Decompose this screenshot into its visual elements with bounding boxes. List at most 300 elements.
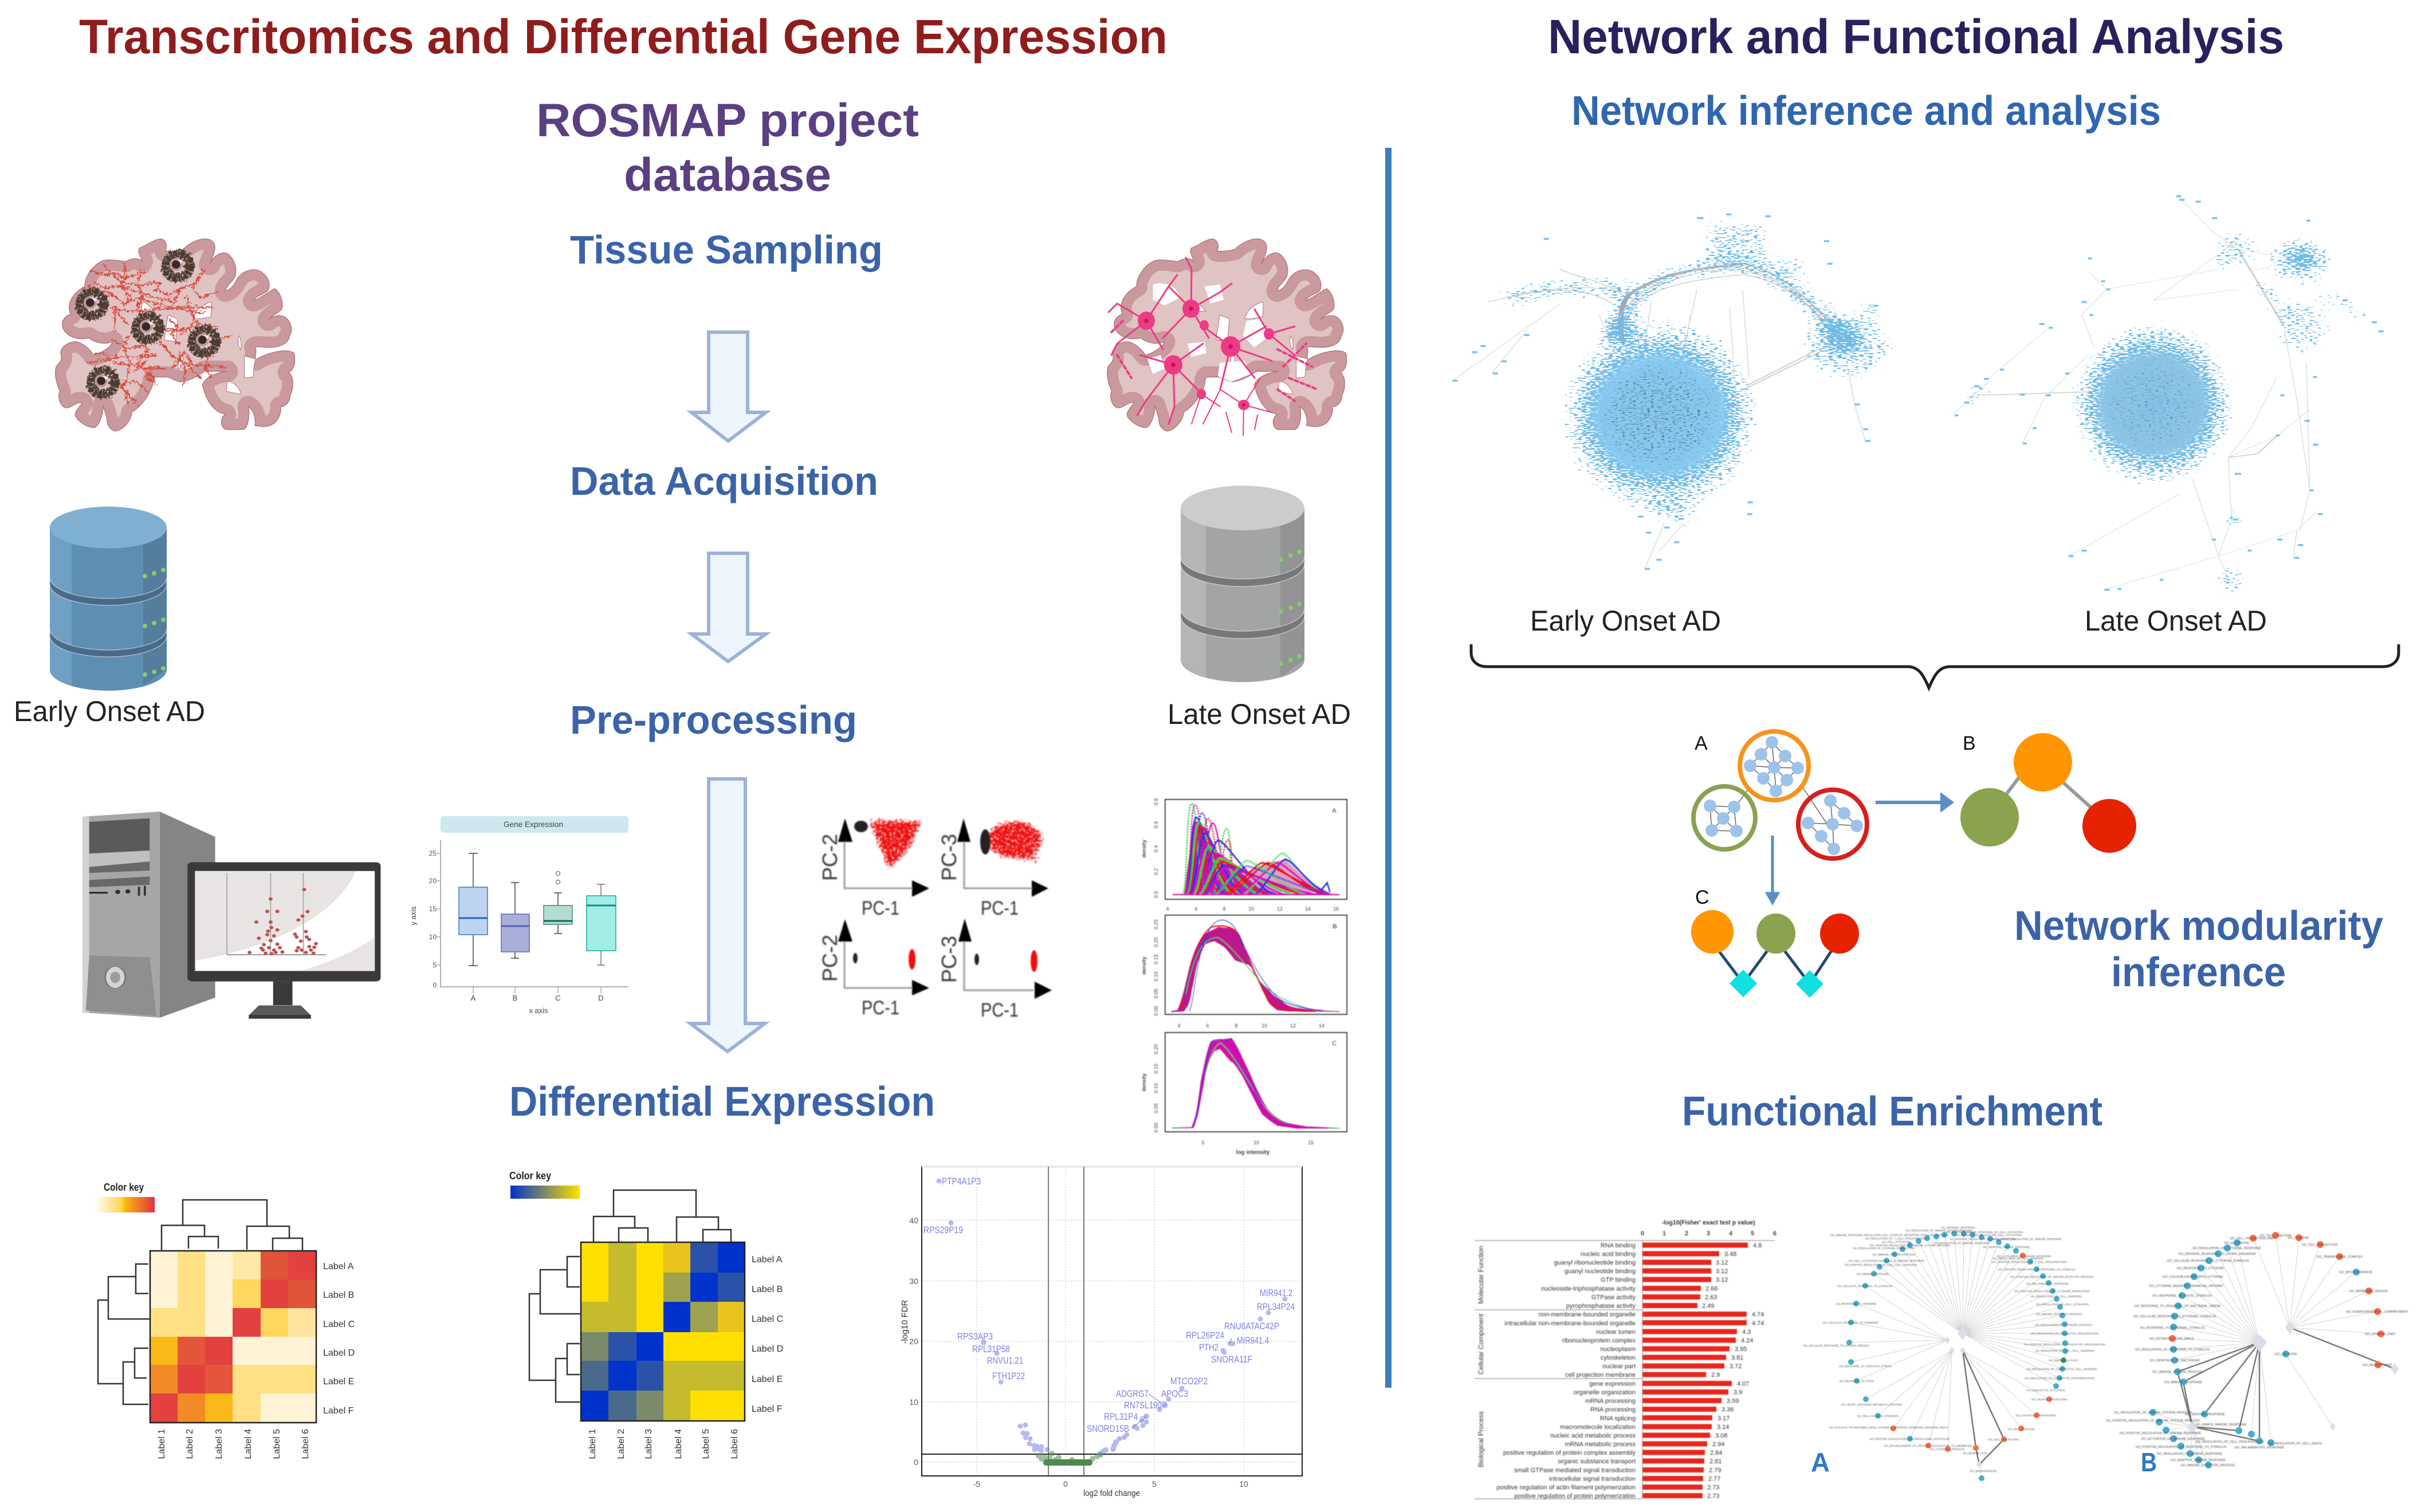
GO network A labels: GO_NEURON_PROJECTION [2031, 1398, 2067, 1401]
chart: heatmap 2 (blue-yellow) with dendrograms: Label F [752, 1404, 783, 1414]
chart: gene expression box plot: 0 [433, 981, 437, 989]
GO network B labels: GO_ACTIVATION_OF_IMMUNE_RESPONSE [2141, 1438, 2205, 1441]
bar values: 3.36 [1722, 1407, 1734, 1413]
bar values: 4.74 [1752, 1312, 1764, 1318]
bar values: 3.12 [1716, 1268, 1728, 1275]
chart: heatmap 1 (red-yellow) with dendrograms: Label E [323, 1377, 354, 1387]
volcano gene labels: RPL31P58 [972, 1344, 1010, 1354]
arrow: data acquisition to pre-processing [691, 553, 766, 662]
density plot A axes: 0.2 [1153, 868, 1159, 875]
bar values: 4.07 [1737, 1380, 1749, 1387]
chart: PCA scatter panels: PC-1 [981, 897, 1019, 919]
chart: heatmap 2 (blue-yellow) with dendrograms: Label E [752, 1375, 783, 1384]
chart: gene expression box plot: 25 [429, 849, 437, 857]
heading: Network modularity inference: Network modularity [2014, 903, 2383, 949]
density plot C axes: density [1141, 1073, 1147, 1092]
volcano gene labels [923, 1176, 1295, 1434]
bar values: 3.17 [1717, 1415, 1730, 1422]
color key [95, 1182, 155, 1212]
volcano axes: 40 [909, 1216, 918, 1225]
heading: Data Acquisition: Data Acquisition [570, 459, 878, 503]
heading: Differential Expression: Differential Expression [509, 1079, 935, 1125]
chart: heatmap 1 (red-yellow) with dendrograms: Label 6 [301, 1429, 311, 1459]
GO network A labels: GO_SYNAPTIC_COMPARTMENT [2016, 1414, 2057, 1417]
GO network B labels [2106, 1234, 2408, 1467]
GO network B labels: GO_REGULATION_OF_RESPONSE_TO_STIMULUS [2135, 1348, 2210, 1352]
GO network B labels: GO_EXTRACELLULAR_SPACE [2149, 1337, 2194, 1341]
bar labels: small GTPase mediated signal transduction [1514, 1467, 1636, 1474]
bar labels: mRNA processing [1585, 1398, 1636, 1405]
bar values: 4.3 [1742, 1329, 1751, 1336]
GO network A labels: GO_RNA_CATABOLIC_PROCESS [1857, 1415, 1899, 1418]
bar labels: cytoskeleton [1601, 1354, 1636, 1361]
volcano gene labels: RPS29P19 [923, 1224, 963, 1235]
diagram: network modules A B C [1691, 731, 2136, 998]
chart: gene expression box plot: C [555, 994, 561, 1002]
bar labels: nuclear lumen [1596, 1329, 1636, 1336]
bar labels: RNA splicing [1600, 1415, 1636, 1422]
chart: GO enrichment bar chart [1475, 1219, 1777, 1500]
density plot A axes: 6 [1194, 906, 1198, 912]
density plot B axes: 12 [1290, 1023, 1296, 1029]
volcano gene labels: RNU6ATAC42P [1224, 1321, 1279, 1332]
PCA blobs [868, 819, 1044, 872]
chart: PCA scatter panels: PC-2 [818, 935, 842, 982]
density plot B axes: 8 [1235, 1023, 1238, 1029]
heading: Tissue Sampling: Tissue Sampling [570, 227, 883, 272]
bars [1642, 1243, 1748, 1498]
chart: heatmap 2 (blue-yellow) with dendrograms: Label 5 [701, 1429, 711, 1459]
bar labels: macromolecule localization [1560, 1424, 1636, 1431]
bar values: 2.79 [1709, 1467, 1721, 1474]
GO network A labels: GO_POSITIVE_REGULATION_OF_CELL_ACTIVATION [1950, 1238, 2016, 1241]
bar labels: intracellular non-membrane-bounded organelle [1504, 1320, 1636, 1327]
GO network B labels: GO_SYNAPSE_PART [2365, 1333, 2396, 1336]
label: Early Onset AD (network): Early Onset AD [1530, 605, 1721, 637]
GO network B labels: GO_SOMATODENDRITIC_COMPARTMENT [2346, 1310, 2408, 1314]
chart: gene expression box plot: A [471, 994, 476, 1002]
GO network A labels: GO_POSITIVE_REGULATION_OF_RESPONSE_TO_STIMULUS [1998, 1268, 2075, 1271]
bar labels: nuclear part [1602, 1363, 1636, 1370]
volcano gene labels: RNVU1.21 [987, 1355, 1023, 1366]
panel B: module graph [1960, 733, 2136, 853]
bar values: 2.63 [1705, 1294, 1717, 1301]
bar values: 3.72 [1730, 1363, 1742, 1370]
density plot B axes: 0.00 [1153, 1006, 1159, 1016]
GO network B labels: GO_CYTOKINE_MEDIATED_SIGNALING_PATHWAY [2149, 1285, 2223, 1288]
box plot header: Gene Expression [504, 820, 563, 829]
GO network B labels: GO_INNATE_IMMUNE_RESPONSE [2196, 1423, 2247, 1427]
heatmap cells [581, 1242, 745, 1421]
GO network A labels: GO_NUCLEAR_TRANSCRIBED_MRNA_CATABOLIC_PROCESS_NONSENSE_MEDIATED_DECAY [1829, 1426, 1948, 1429]
bar labels: organic substance transport [1558, 1458, 1636, 1465]
density plot A axes: 0.6 [1153, 821, 1159, 828]
density plot B axes: 0.20 [1153, 937, 1159, 947]
bar values: 3.08 [1715, 1432, 1727, 1439]
bar labels: ribonucleoprotein complex [1562, 1337, 1636, 1344]
volcano gene labels: PTH2 [1199, 1342, 1219, 1353]
density plot C axes: 0.00 [1153, 1123, 1159, 1133]
bar labels: intracellular signal transduction [1549, 1475, 1636, 1482]
GO network A labels: GO_REGULATION_OF_LEUKOCYTE_PROLIFERATION [2031, 1332, 2098, 1335]
density plot A axes: 14 [1305, 906, 1311, 912]
chart: GO enrichment bar chart: 4 [1729, 1230, 1733, 1237]
panel letter A: A [1811, 1447, 1830, 1477]
density plot B axes: 6 [1206, 1023, 1209, 1029]
bar labels: gene expression [1589, 1380, 1636, 1387]
GO network A labels: GO_REGULATION_OF_MYELOID_CELL_ACTIVATION [1956, 1234, 2021, 1237]
bar labels: guanyl ribonucleotide binding [1554, 1259, 1636, 1266]
dendrograms [529, 1190, 731, 1402]
GO network A labels: GO_REGULATION_OF_CELL_ACTIVATION [2036, 1303, 2089, 1306]
bar values: 3.59 [1727, 1398, 1739, 1405]
GO network B labels: GO_DEFENSE_RESPONSE_TO_OTHER_ORGANISM [2179, 1253, 2256, 1256]
bar values: 4.24 [1741, 1337, 1753, 1344]
volcano green points [1036, 1451, 1103, 1466]
GO network B labels: GO_LOCATION [2275, 1353, 2297, 1356]
bar values: 3.12 [1716, 1259, 1728, 1266]
GO network B labels: GO_COLOCALIZATION_WITH_CYTOKINE [2163, 1275, 2223, 1279]
chart: density plots A B C [1141, 798, 1347, 1156]
panel A: module networks: A [1695, 733, 1708, 754]
bar values: 2.73 [1707, 1493, 1719, 1500]
chart: GO enrichment bar chart: 1 [1662, 1230, 1666, 1237]
bar labels: mRNA metabolic process [1565, 1441, 1636, 1448]
box A [459, 853, 488, 966]
density plot C axes [1141, 1040, 1337, 1156]
volcano gene labels: SNORD15B [1087, 1423, 1129, 1434]
density plot C axes: 10 [1253, 1140, 1259, 1145]
GO network B labels: GO_REGULATION_OF_IMMUNE_RESPONSE [2157, 1452, 2223, 1456]
chart: heatmap 1 (red-yellow) with dendrograms [95, 1182, 355, 1459]
GO network A labels: GO_INFLAMMATORY_RESPONSE [2026, 1282, 2069, 1285]
GO network B labels: GO_REGULATION_OF_CELL_DEATH [2268, 1442, 2322, 1446]
chart: gene expression box plot: 10 [429, 933, 437, 941]
arrow: tissue sampling to data acquisition [691, 332, 766, 441]
density plot B axes: 0.25 [1153, 919, 1159, 930]
GO network B labels: GO_ADAPTIVE_IMMUNE_RESPONSE [2171, 1459, 2226, 1462]
icon: desktop computer with volcano plot on screen [82, 812, 380, 1019]
GO network A labels [1803, 1226, 2105, 1472]
chart: heatmap 1 (red-yellow) with dendrograms: Label A [323, 1262, 354, 1271]
chart: gene expression box plot: B [513, 994, 517, 1002]
volcano gene labels: FTH1P22 [992, 1371, 1025, 1381]
density plot C axes: log intensity [1236, 1149, 1270, 1156]
title: Transcritomics and Differential Gene Expression: Transcritomics and Differential Gene Expression [79, 10, 1168, 64]
box C [544, 872, 572, 934]
chart: GO enrichment bar chart: -log10(Fisher' exact test p value) [1661, 1219, 1755, 1226]
heading: Functional Enrichment: Functional Enrichment [1682, 1089, 2102, 1135]
label: Late Onset AD (network): Late Onset AD [2085, 605, 2267, 637]
GO network A labels: GO_REGULATION_OF_CELL_ADHESION [2031, 1295, 2081, 1298]
bar values: 3.9 [1734, 1389, 1742, 1396]
chart: PCA scatter panels: PC-3 [937, 936, 961, 983]
bar labels: positive regulation of actin filament polymerization [1496, 1485, 1636, 1491]
network graph: late onset AD [1951, 196, 2383, 595]
density plot A axes: density [1141, 840, 1147, 858]
chart: PCA scatter panels: PC-3 [937, 834, 961, 881]
bar values [1702, 1242, 1764, 1500]
GO network A hubs [1944, 1326, 1982, 1468]
density plot A axes: 10 [1248, 906, 1254, 912]
density plot C axes: 5 [1201, 1140, 1205, 1145]
GO network A labels: GO_CELL_ACTIVATION [1882, 1241, 1911, 1243]
color key: Color key [104, 1182, 144, 1193]
bar values: 3.95 [1735, 1346, 1747, 1353]
dendrograms [98, 1200, 302, 1404]
density plot B axes: B [1333, 923, 1337, 930]
bar values: 4.74 [1752, 1320, 1764, 1327]
GO network A labels: GO_REGULATION_OF_CYTOKINE_PRODUCTION [1853, 1247, 1915, 1250]
volcano axes: 20 [909, 1337, 918, 1346]
GO network B labels: GO_REGULATION_OF_CELL_PROLIFERATION [2195, 1440, 2264, 1444]
bar values: 2.73 [1707, 1485, 1719, 1491]
GO network A labels: GO_ESTABLISHMENT_OF_PROTEIN_LOCALIZATION_TO_MEMBRANE [1884, 1444, 1971, 1447]
chart: GO enrichment bar chart: 5 [1751, 1230, 1754, 1237]
chart: GO network A [1803, 1226, 2105, 1481]
bar labels: cell projection membrane [1565, 1372, 1636, 1379]
chart: GO enrichment bar chart: 3 [1707, 1230, 1710, 1237]
chart: heatmap 1 (red-yellow) with dendrograms: Label B [323, 1290, 354, 1300]
volcano gene labels: MIR941.2 [1260, 1287, 1292, 1298]
density plot C axes: 0.15 [1153, 1064, 1159, 1074]
chart: PCA scatter panels: PC-2 [818, 834, 842, 881]
heatmap cells [150, 1251, 316, 1423]
bar chart category labels [1477, 1246, 1485, 1467]
density plot A axes: 0.4 [1153, 845, 1159, 852]
volcano gene labels: PTP4A1P3 [942, 1176, 981, 1187]
chart: heatmap 1 (red-yellow) with dendrograms: Label C [323, 1320, 355, 1329]
density plot B axes: 10 [1261, 1023, 1267, 1029]
GO network B labels: GO_CELL_JUNCTION [2259, 1234, 2292, 1238]
bar labels: non-membrane-bounded organelle [1539, 1312, 1636, 1318]
bar values: 4.8 [1753, 1242, 1762, 1249]
icon: brain with plaques and tangles (early onset) [56, 239, 295, 431]
GO network A labels: GO_CELLULAR_RESPONSE_TO_STIMULUS [1837, 1285, 1892, 1287]
bar values: 2.81 [1709, 1458, 1722, 1465]
chart: gene expression box plot: D [598, 994, 604, 1002]
GO network B labels: GO_REGULATION_OF_IMMUNE_SYSTEM_PROCESS [2114, 1411, 2192, 1415]
heading: Network inference and analysis: Network inference and analysis [1571, 88, 2161, 134]
volcano gene labels: RPL34P24 [1257, 1301, 1295, 1312]
arrow: A to C [1767, 836, 1778, 903]
GO network B labels: GO_CELL_PROJECTION_PART [2230, 1237, 2275, 1241]
GO network B labels: GO_DEFENSE_RESPONSE [2185, 1413, 2225, 1416]
GO network B labels: GO_RESPONSE_TO_MOLECULE_OF_BACTERIAL_ORIGIN [2135, 1305, 2220, 1308]
GO network A labels: GO_RESPONSE_TO_HORMONE [1836, 1302, 1876, 1305]
GO network A labels: GO_CELLULAR_RESPONSE_TO_HORMONE [1823, 1321, 1878, 1324]
chart: heatmap 1 (red-yellow) with dendrograms: Label 5 [272, 1429, 282, 1459]
GO network A labels: GO_IMMUNE_SYSTEM_PROCESS [1873, 1253, 1915, 1256]
density plot B axes: 14 [1319, 1023, 1324, 1029]
chart: volcano plot [900, 1167, 1302, 1498]
GO network B labels: GO_POSITIVE_REGULATION_OF_RESPONSE_TO_STIMULUS [2136, 1446, 2226, 1449]
chart: PCA scatter panels [818, 818, 1052, 1021]
heading: Network modularity inference [2014, 903, 2383, 995]
GO network A labels: GO_RESPONSE_TO_TOXIN [1840, 1380, 1874, 1383]
bar values: 2.77 [1708, 1475, 1720, 1482]
icon: blue database (early onset) [50, 506, 167, 691]
volcano axes: 10 [1239, 1479, 1248, 1489]
chart: gene expression box plot: 20 [429, 877, 437, 885]
GO network B labels: GO_RESPONSE_TO_BIOTIC_STIMULUS [2153, 1294, 2212, 1298]
bar labels: nucleoside-triphosphatase activity [1541, 1285, 1636, 1292]
GO network B labels: GO_NEURON_PART [2363, 1364, 2393, 1367]
GO network B labels: GO_POSITIVE_REGULATION_OF_IMMUNE_SYSTEM_PROCESS [2106, 1419, 2200, 1423]
volcano axes: 5 [1152, 1479, 1157, 1489]
chart: heatmap 1 (red-yellow) with dendrograms: Label 2 [185, 1429, 195, 1459]
GO network A labels: GO_INHERENT_REGULATION_OF_IMMUNE_RESPONSE [1991, 1238, 2062, 1241]
GO network B labels: GO_CELLULAR_RESPONSE_TO_EXTERNAL_STIMULUS [2133, 1315, 2216, 1318]
GO network A labels: GO_DEFENSE_RESPONSE [1941, 1226, 1975, 1229]
GO network A labels: GO_LEUKOCYTE_ACTIVATION [2027, 1389, 2065, 1392]
chart: GO network B [2106, 1232, 2408, 1468]
GO network B labels: GO_MITOCHONDRION [2339, 1271, 2372, 1274]
volcano axes [909, 1216, 1248, 1489]
bar labels [1496, 1242, 1636, 1500]
GO network A labels: GO_ENZYME_ACTIVITY [2049, 1359, 2078, 1362]
density plot B axes: 0.15 [1153, 954, 1159, 964]
density plot B axes: 4 [1177, 1023, 1181, 1029]
chart: heatmap 1 (red-yellow) with dendrograms: Label F [323, 1406, 354, 1416]
bar labels: pyrophosphatase activity [1566, 1303, 1636, 1310]
chart: gene expression box plot: 5 [433, 961, 437, 969]
density plot A axes: 12 [1277, 906, 1283, 912]
chart: heatmap 2 (blue-yellow) with dendrograms: Label 1 [588, 1429, 598, 1459]
GO network B labels: GO_IMMUNE_EFFECTOR_PROCESS [2181, 1464, 2235, 1467]
chart: GO enrichment bar chart: 0 [1641, 1230, 1644, 1237]
bar values: 3.14 [1717, 1424, 1729, 1431]
GO network B nodes [2149, 1239, 2360, 1468]
density plot B axes: density [1141, 956, 1147, 975]
heading: ROSMAP project database [536, 94, 919, 201]
volcano gene labels: ADGRG7 [1116, 1388, 1149, 1399]
chart: heatmap 2 (blue-yellow) with dendrograms: Label 3 [644, 1429, 654, 1459]
density plot A axes [1141, 798, 1339, 912]
GO network B labels: GO_RESPONSE_TO_BACTERIUM [2150, 1359, 2200, 1363]
volcano gene labels: RPL31P4 [1104, 1411, 1138, 1422]
density plot A axes: 16 [1333, 906, 1339, 912]
GO network A labels: GO_NEURON_PART [1963, 1452, 1988, 1455]
GO network A labels: GO_REGULATION_OF_LYMPHOCYTE_CELL_ADHESION [2027, 1368, 2097, 1371]
icon: brain with pink degenerating neurons (late onset) [1107, 239, 1347, 435]
GO network A nodes [1846, 1231, 2068, 1481]
GO network A labels: GO_REGULATION_OF_CELL_ADHESION [1993, 1257, 2043, 1260]
title: Network and Functional Analysis: Network and Functional Analysis [1548, 10, 2284, 64]
bar labels: RNA binding [1601, 1242, 1636, 1249]
GO network A labels: GO_IMMUNE_EFFECTOR_PROCESS [2036, 1313, 2082, 1316]
GO network B labels: GO_TRANSFERASE_COMPLEX [2317, 1255, 2363, 1259]
chart: gene expression box plot [409, 816, 628, 1015]
chart: heatmap 1 (red-yellow) with dendrograms: Label 3 [214, 1429, 224, 1459]
GO network A labels: GO_CELLULAR_RESPONSE_TO_OXYGEN_SPECIES [1803, 1344, 1869, 1347]
chart: GO enrichment bar chart: 6 [1773, 1230, 1777, 1237]
GO network A labels: GO_POSITIVE_REGULATION_OF_IMMUNE_SYSTEM_PROCESS [1870, 1244, 1950, 1247]
GO network B labels: GO_IMMUNE_RESPONSE [2164, 1381, 2203, 1384]
chart: GO enrichment bar chart: 2 [1685, 1230, 1688, 1237]
volcano gene labels: APOC3 [1161, 1388, 1188, 1399]
GO network B labels: GO_RESPONSE_TO_CYTOKINE [2177, 1267, 2224, 1270]
bar values: 3.48 [1724, 1251, 1736, 1258]
density plot B axes [1141, 919, 1337, 1029]
bar values: 2.49 [1702, 1303, 1714, 1310]
panel A: module networks [1693, 731, 1867, 859]
GO network A labels: GO_ADAPTIVE_IMMUNE_RESPONSE [1983, 1246, 2030, 1249]
GO network A labels: GO_ADAPTIVE_IMMUNE_RESPONSE_OF_CELL_ACTIVATION [1946, 1231, 2023, 1234]
GO network B labels: GO_ACTIVATION [2224, 1242, 2249, 1245]
heading: ROSMAP project database: ROSMAP project [536, 94, 919, 147]
GO network B hubs [2187, 1321, 2399, 1433]
panel B: module graph: B [1963, 733, 1976, 754]
GO network B labels: GO_POSITIVE_REGULATION_OF_IMMUNE_RESPONSE [2120, 1432, 2201, 1435]
GO network A labels: GO_POSITIVE_REGULATION_OF_T_CELL_PROLIFERATION [1992, 1261, 2066, 1263]
volcano axes: -5 [973, 1479, 980, 1489]
arrow: A to B [1876, 796, 1951, 809]
chart: volcano plot: -log10 FDR [900, 1300, 910, 1344]
brace joining both networks [1471, 644, 2399, 688]
chart: heatmap 2 (blue-yellow) with dendrograms: Label 4 [674, 1429, 683, 1459]
GO network A labels: GO_ACTIVATION_OF_IMMUNE_RESPONSE [1997, 1255, 2051, 1258]
GO network A labels: GO_CYTOSOLIC_PROCESS [1929, 1448, 1965, 1451]
GO network A labels: GO_IMMUNE_RESPONSE [1857, 1273, 1889, 1275]
bar chart category labels: Biological Process [1477, 1411, 1485, 1467]
chart: PCA scatter panels: PC-1 [862, 897, 899, 919]
GO network B labels: GO_CELL_PROJECTION [2302, 1243, 2337, 1247]
GO network A labels: GO_POSITIVE_REGULATION_OF_CYTOKINE_PRODUCTION [2014, 1290, 2090, 1293]
bar labels: GTP binding [1601, 1277, 1636, 1283]
chart: heatmap 2 (blue-yellow) with dendrograms: Label D [752, 1344, 783, 1354]
GO network B labels: GO_RESPONSE_TO_EXTERNAL_STIMULUS [2140, 1326, 2205, 1330]
chart: gene expression box plot: 15 [429, 905, 437, 913]
volcano axes: 30 [909, 1277, 918, 1286]
density plot B [1141, 915, 1347, 1029]
box B [501, 883, 529, 958]
bar chart category labels: Cellular Component [1477, 1313, 1485, 1375]
density plot B axes: 0.10 [1153, 971, 1159, 982]
chart: gene expression box plot: x axis [529, 1006, 548, 1015]
chart: heatmap 1 (red-yellow) with dendrograms: Label D [323, 1348, 355, 1358]
bar values: 2.66 [1705, 1285, 1717, 1292]
GO network B labels: GO_REGULATION_OF_CYTOKINE_RESPONSE [2192, 1247, 2261, 1250]
GO network A labels: GO_CELL_ACTIVATION_INVOLVED_IN_IMMUNE_RESPONSE [1849, 1259, 1924, 1262]
bar labels: positive regulation of protein polymerization [1514, 1493, 1636, 1500]
chart: volcano plot: log2 fold change [1083, 1489, 1140, 1498]
density plot C [1141, 1033, 1347, 1156]
bar values: 2.94 [1712, 1441, 1724, 1448]
bar labels: nucleic acid metabolic process [1550, 1432, 1636, 1439]
bar labels: organelle organization [1574, 1389, 1636, 1396]
bar chart category labels: Molecular Function [1477, 1246, 1485, 1304]
chart: heatmap 1 (red-yellow) with dendrograms: Label 1 [157, 1429, 167, 1459]
bar labels: nucleoplasm [1600, 1346, 1636, 1353]
heading: Network modularity inference: inference [2111, 950, 2286, 995]
icon: grey database (late onset) [1181, 486, 1304, 682]
volcano blue points [936, 1179, 1288, 1456]
volcano gene labels: MTCO2P2 [1170, 1376, 1208, 1387]
GO network B labels: GO_IMMUNE_SYSTEM_PROCESS [2152, 1371, 2203, 1374]
chart: heatmap 2 (blue-yellow) with dendrograms [509, 1170, 783, 1459]
chart: gene expression box plot: y axis [409, 906, 418, 926]
density plot B axes: 0.05 [1153, 989, 1159, 999]
bar labels: guanyl nucleotide binding [1565, 1268, 1636, 1275]
density plot C axes: 0.05 [1153, 1103, 1159, 1113]
GO network A labels: GO_IMMUNE_RESPONSE_REGULATING_CELL_SURFACE_RECEPTOR_SIGNALING_PATHWAY [1830, 1234, 1948, 1237]
GO network A labels: GO_POSITIVE_REGULATION_OF_IMMUNE_EFFECTOR_PROCESS [2010, 1275, 2094, 1278]
box D [587, 884, 616, 965]
GO network A labels: GO_RESPONSE_TO_OXIDATIVE_STRESS [1839, 1365, 1892, 1368]
panel letter B: B [2141, 1447, 2157, 1477]
chart: heatmap 1 (red-yellow) with dendrograms: Label 4 [243, 1429, 253, 1459]
